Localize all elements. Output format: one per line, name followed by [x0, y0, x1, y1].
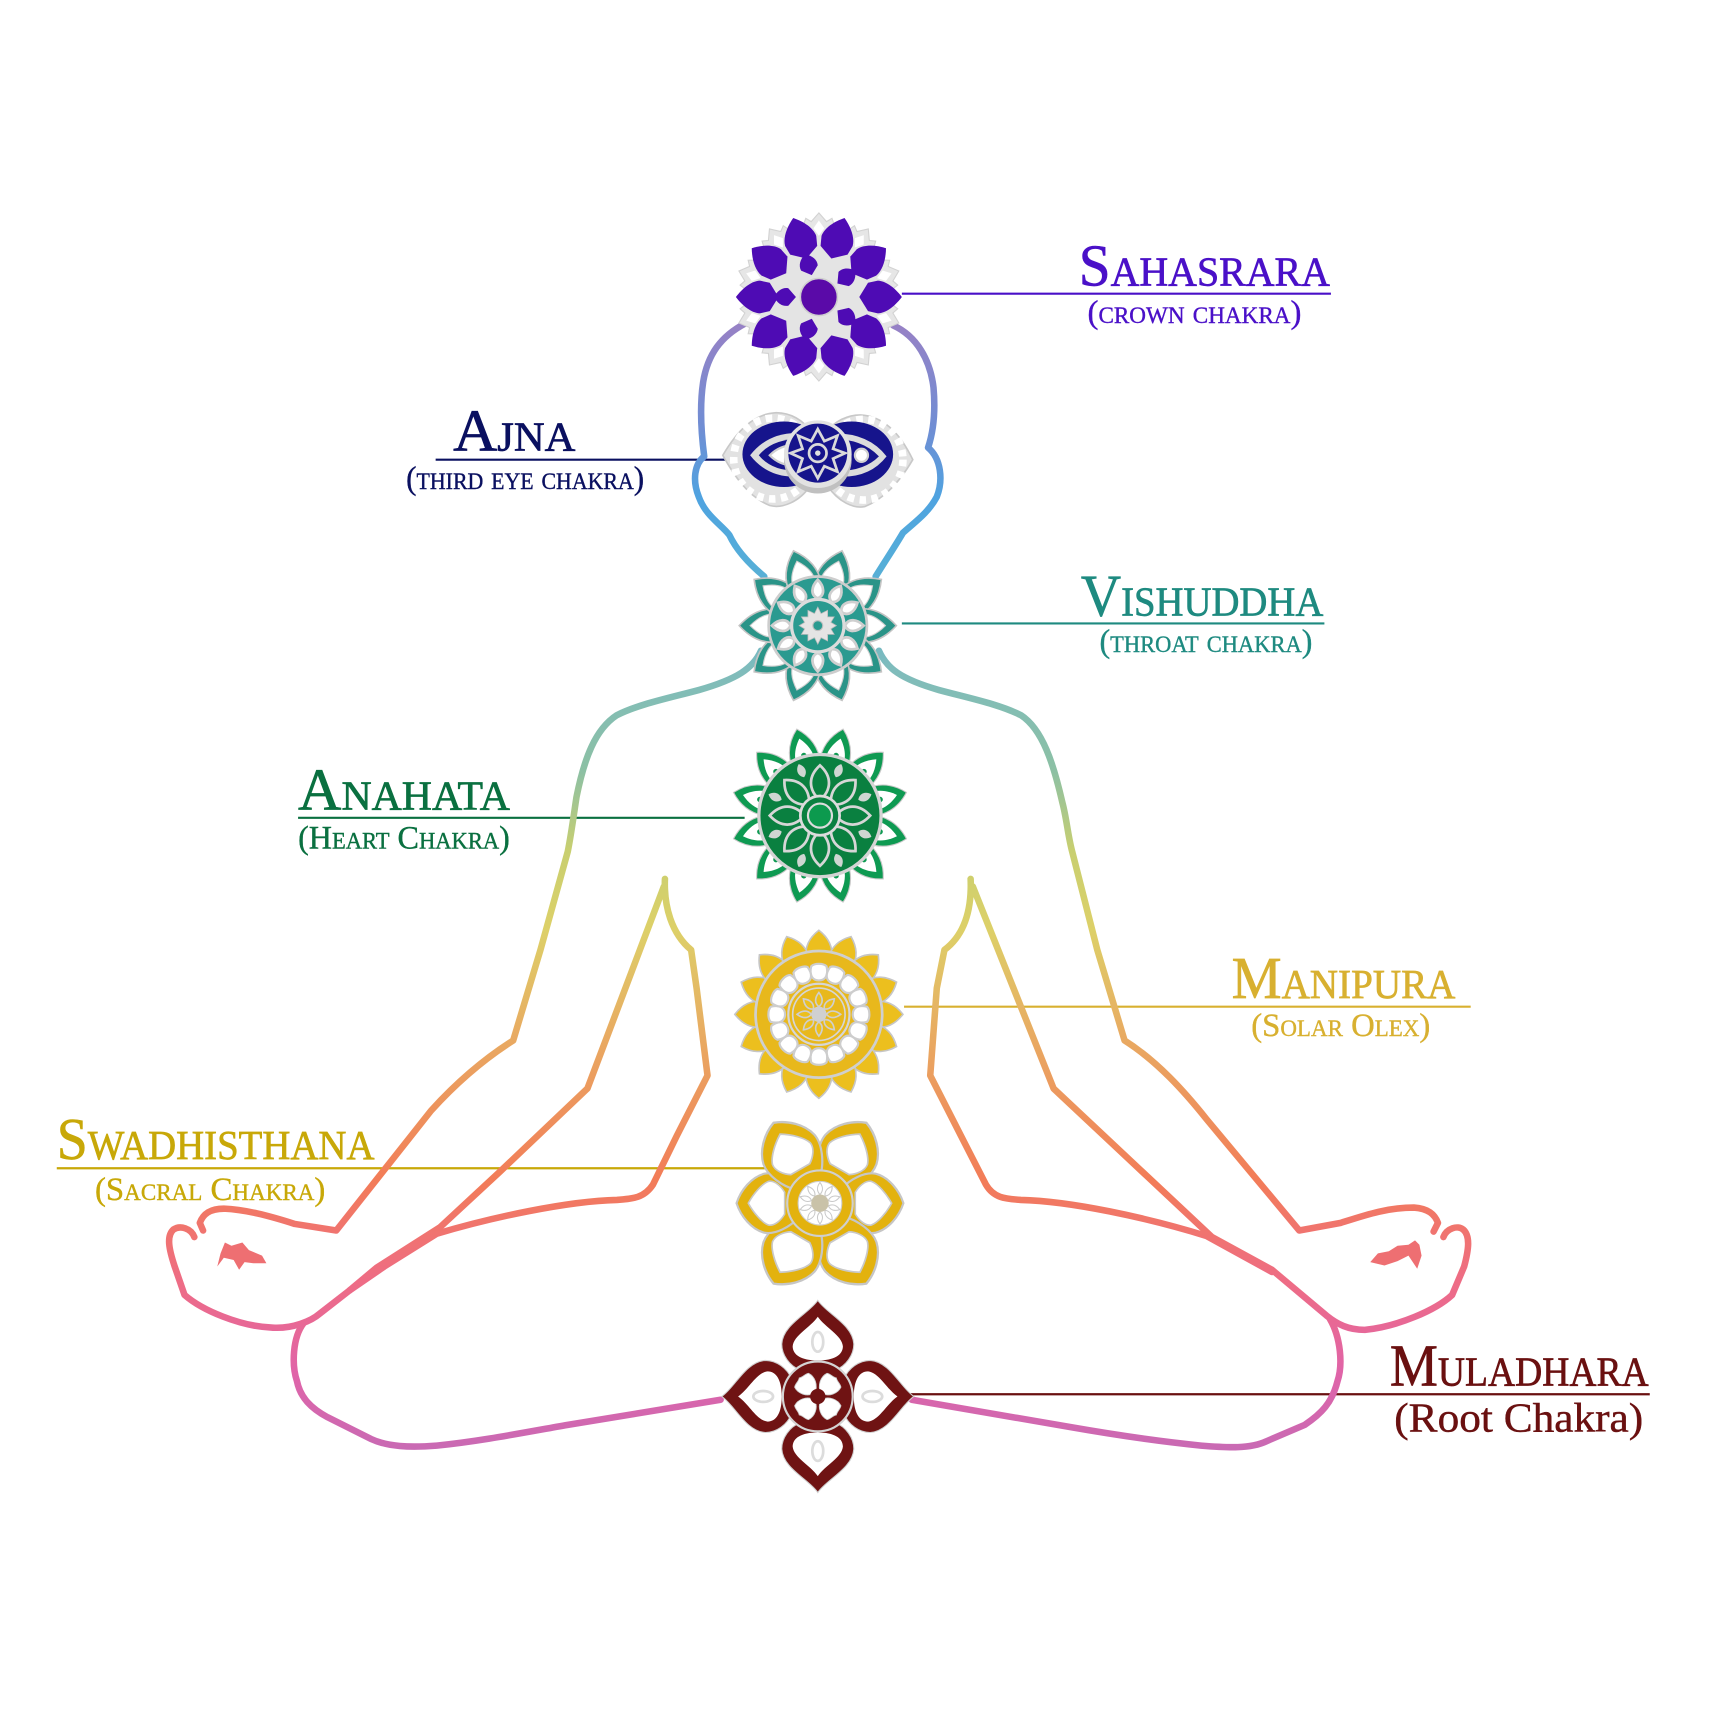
- heading: Swadhisthana: [57, 1106, 375, 1172]
- label: Ajna: [406, 397, 644, 497]
- chakra: Vishuddha: [739, 546, 896, 706]
- subheading: (Sacral Chakra): [95, 1172, 325, 1208]
- subheading: (crown chakra): [1087, 295, 1301, 331]
- leader lines: [57, 294, 1650, 1394]
- chakra: Anahata: [730, 725, 910, 906]
- silver lace back: [733, 213, 905, 381]
- chakra: Sahasrara: [733, 213, 905, 381]
- six petals: [737, 1108, 903, 1299]
- label: Sahasrara: [1079, 233, 1330, 331]
- center: [787, 1170, 853, 1236]
- heading: Vishuddha: [1081, 562, 1324, 628]
- right foot mark: [1370, 1240, 1422, 1269]
- label: Vishuddha: [1081, 562, 1324, 660]
- subheading: (Root Chakra): [1394, 1394, 1643, 1441]
- subheading: (Solar Olex): [1251, 1008, 1430, 1044]
- label: Manipura: [1232, 945, 1456, 1044]
- four petals: [722, 1300, 914, 1493]
- disc: [759, 754, 881, 877]
- center disc: [800, 278, 837, 316]
- subheading: (third eye chakra): [406, 461, 644, 497]
- right wing: [810, 415, 913, 507]
- heading: Manipura: [1232, 945, 1456, 1011]
- body outline: [169, 323, 1468, 1447]
- label: Swadhisthana: [57, 1106, 375, 1208]
- heading: Ajna: [453, 397, 576, 463]
- chakra: Swadhisthana: [737, 1108, 903, 1299]
- heading: Sahasrara: [1079, 233, 1330, 299]
- green petals: [730, 725, 910, 906]
- disc: [769, 576, 867, 675]
- subheading: (throat chakra): [1099, 624, 1312, 660]
- teal petals: [739, 546, 896, 706]
- chakra: Muladhara: [722, 1300, 914, 1493]
- left wing: [723, 413, 825, 506]
- yellow petals: [735, 930, 903, 1098]
- chakra: Ajna: [723, 413, 913, 507]
- label: Anahata: [298, 757, 510, 856]
- purple inner petals: [774, 252, 860, 342]
- center medallion: [784, 420, 852, 494]
- disc: [756, 951, 882, 1078]
- subheading: (Heart Chakra): [298, 820, 510, 856]
- heading: Muladhara: [1390, 1333, 1649, 1399]
- heading: Anahata: [298, 757, 510, 823]
- purple outer petals: [736, 213, 902, 381]
- left foot mark: [217, 1243, 266, 1270]
- center: [783, 1362, 853, 1431]
- label: Muladhara: [1390, 1333, 1649, 1441]
- chakra: Manipura: [735, 930, 903, 1098]
